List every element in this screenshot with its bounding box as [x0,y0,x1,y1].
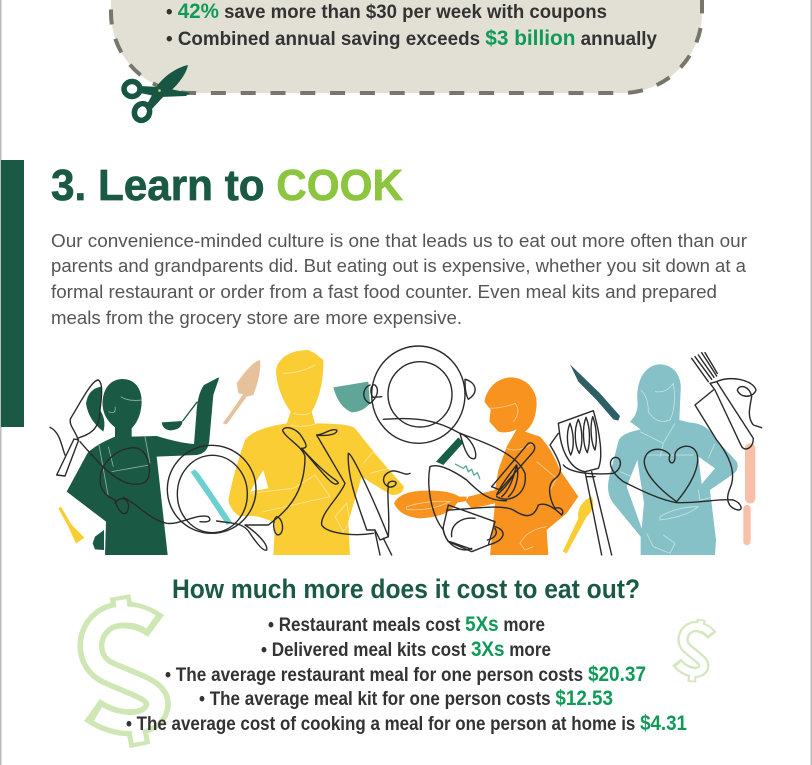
text block: intro paragraph: meals from the grocery store are more expensive. [51,308,462,328]
icon: small whisk [58,507,84,544]
coupon stat: 3 billion: • Combined annual saving exceeds $3 billion annually [166,27,657,50]
figure: woman in green with ladle [67,377,219,555]
text block: intro paragraph: Our convenience-minded culture is one that leads us to eat out more often than our [51,231,747,251]
panel: coupon savings [111,0,702,93]
illustration: people cooking, left half [50,350,410,555]
heading: 3. Learn to Cook: 3. Learn to COOK [51,161,403,210]
icon: small dollar sign [672,616,716,684]
text block: cost list: • Delivered meal kits cost 3Xs more [261,638,551,661]
icon: teal cup [333,382,370,412]
line art: pan, whisk, spatula, heart and fork [372,346,762,555]
icon: yellow spoon [563,497,593,553]
icon: frying pan [394,491,467,518]
figure: man in yellow [228,350,404,555]
text block: cost list: • Restaurant meals cost 5Xs more [268,613,545,636]
icon: corkscrew spiral [455,464,480,479]
icon: rolling pin [743,443,755,545]
icon: corkscrew [436,437,463,465]
icon: teal fork [191,469,232,525]
icon: large dollar sign [91,596,157,746]
icon: cake server [223,360,260,424]
line art: bottle, plate, spoon and knife [50,380,410,555]
coupon stat: 42 percent: • 42% save more than $30 per week with coupons [166,0,607,23]
text block: intro paragraph: parents and grandparents did. But eating out is expensive, whether you sit down at a [51,256,747,276]
text block: intro paragraph: formal restaurant or order from a fast food counter. Even meal kits and prepared [51,282,717,302]
accent bar [1,160,24,427]
illustration: people cooking, right half [372,346,762,555]
figure: woman in teal [608,364,738,555]
text block: intro paragraph [51,231,747,328]
heading: How much more does it cost to eat out?: How much more does it cost to eat out? [172,574,640,604]
figure: orange cook [466,377,578,555]
text block: cost list [126,613,687,735]
text block: cost list: • The average cost of cooking a meal for one person at home is $4.31 [126,712,687,735]
text block: cost list: • The average restaurant meal for one person costs $20.37 [165,663,646,686]
text block: cost list: • The average meal kit for one person costs $12.53 [199,687,613,710]
icon: scissors [124,65,190,123]
icon: dark knife [570,364,620,421]
